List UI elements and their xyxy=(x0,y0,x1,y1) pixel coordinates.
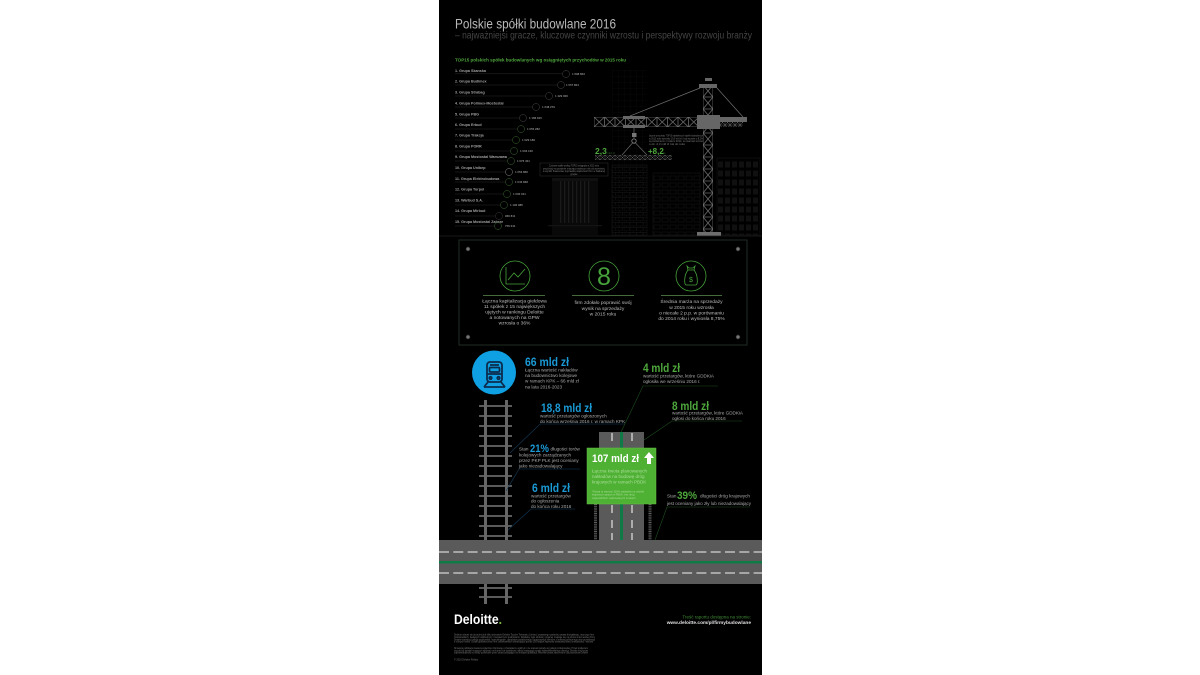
row 9 xyxy=(455,155,530,164)
sign description: nakładów na budowę dróg xyxy=(592,474,645,479)
row 14: 14. Grupa Mirbud xyxy=(455,209,486,213)
row 7: 7. Grupa Trakcja xyxy=(455,134,485,138)
crane description text xyxy=(649,134,704,146)
fact: market capitalisation: 11 spółek z 15 największych xyxy=(484,304,545,310)
rails xyxy=(486,400,506,604)
callout: 39%: długości dróg krajowych xyxy=(700,494,750,498)
crane description text: w porównaniu z rokiem 2014, co stanowi wzrost xyxy=(649,139,703,143)
callout: 6 mld zł: do ogłoszenia xyxy=(531,499,560,504)
fact: market capitalisation: a notowanych na GPW xyxy=(489,315,540,321)
callout: 18,8 mld zł xyxy=(510,403,626,453)
row 5: 5. Grupa PBG xyxy=(455,113,479,117)
panel screws xyxy=(466,247,740,339)
row 14: 966 811 xyxy=(505,214,516,218)
callout: 21%: 21% xyxy=(530,443,549,455)
row 1: 1. Grupa Skanska xyxy=(455,69,487,73)
callout: 66 mld zł: na budownictwo kolejowe xyxy=(525,373,578,378)
row 6 xyxy=(455,123,540,132)
stat 2,3 on beam xyxy=(595,146,615,156)
fact: market capitalisation: wzrosła o 36% xyxy=(499,320,531,326)
row 9: 9. Grupa Mostostal Warszawa xyxy=(455,155,508,159)
note box: a wyniki finansowe poprawiła większość firm w badanej xyxy=(543,170,605,173)
callout: 66 mld zł: 66 mld zł xyxy=(525,357,570,369)
rail track xyxy=(479,400,512,604)
row 10: 10. Grupa Unibep xyxy=(455,166,486,170)
row 3: 1 429 006 xyxy=(555,94,568,98)
row 7: 1 029 188 xyxy=(522,138,535,142)
legal text: Deloitte odnosi się do jednej lub kilku jednostek Deloitte Touche Tohmatsu Limited, prywatnego podmiotu prawa brytyjskiego, oraz jego firm xyxy=(454,632,594,636)
callout: 66 mld zł: na lata 2016-2023 xyxy=(525,384,562,389)
row 10 xyxy=(455,166,528,176)
icon: number eight xyxy=(589,261,619,291)
row 4: 4. Grupa Polimex-Mostostal xyxy=(455,101,504,105)
note box xyxy=(540,163,608,176)
callout: 66 mld zł xyxy=(525,357,579,389)
stat 2,3 on beam: 2,3 xyxy=(595,146,607,156)
sign description: krajowych w ramach PBDK xyxy=(592,480,646,484)
legal text: Deloitte świadczy usługi audytorskie, konsultingowe, doradztwa podatkowego i finansowego klientom z sektora publicznego oraz prywatnego xyxy=(454,637,596,641)
row 12: 12. Grupa Torpol xyxy=(455,188,484,192)
crane jib xyxy=(594,88,747,129)
horizontal road xyxy=(439,540,762,584)
fact: market capitalisation: ujętych w rankingu Deloitte xyxy=(485,310,544,316)
fact: eight companies: firm zdołało poprawić swój xyxy=(574,300,632,306)
callout: 4 mld zł: 4 mld zł xyxy=(643,363,681,375)
callout: 6 mld zł xyxy=(508,483,575,530)
fact: sales margin: o niecałe 2 p.p. w porównaniu xyxy=(659,310,724,316)
callout: 39%: Stan xyxy=(667,494,677,498)
callout: 21%: kolejowych zarządzanych xyxy=(519,452,572,457)
brick building xyxy=(612,165,647,235)
ground line xyxy=(439,235,762,237)
fact: sales margin: Średnia marża na sprzedaży xyxy=(660,297,723,305)
sign footnote: krajowych ujętych w PBDK, bez dróg xyxy=(592,493,635,497)
icon: money bag: $ xyxy=(689,277,693,284)
fact: sales margin: w 2015 roku wzrosła xyxy=(669,305,714,311)
panel: key facts plate xyxy=(459,240,747,345)
callout: 21%: długości torów xyxy=(550,446,581,452)
row 11 xyxy=(455,177,528,186)
page background panel xyxy=(439,0,762,675)
callout: 21% xyxy=(506,443,581,491)
road sign: 107 mld zł xyxy=(587,448,656,504)
sign headline: 107 mld zł xyxy=(592,453,639,465)
fact: eight companies: wynik na sprzedaży xyxy=(582,306,625,312)
callout: 39%: 39% xyxy=(677,490,697,502)
report link: www.deloitte.com/pl/firmybudowlane xyxy=(666,620,751,626)
legal text: członkowskich, będących oddzielnymi i niezależnymi podmiotami. Dokładny opis struktury prawnej znajduje się na stronie internetowej firmy xyxy=(454,635,596,639)
Deloitte logo: Deloitte. xyxy=(454,611,502,627)
row 15 xyxy=(455,220,516,230)
fact: sales margin xyxy=(658,296,725,322)
row 4 xyxy=(455,101,555,110)
callout: 21%: przez PKP PLK jest oceniany xyxy=(519,458,579,463)
middle office building xyxy=(653,173,700,235)
callout: 6 mld zł: 6 mld zł xyxy=(532,483,571,495)
legal text: z różnych branż. Dzięki globalnej sieci firm członkowskich obejmującej ponad 150 krajów zapewnia światowej klasy umiejętności i wiedzę xyxy=(454,640,594,644)
row 8: 8. Grupa PORR xyxy=(455,144,482,148)
callout: 66 mld zł: Łączna wartość nakładów xyxy=(525,368,578,372)
row 13: 1 190 985 xyxy=(510,203,523,207)
callout: 4 mld zł: wartość przetargów, które GDDKiA xyxy=(643,374,715,378)
title block xyxy=(455,16,752,42)
callout: 4 mld zł: ogłosiła we wrześniu 2016 r. xyxy=(643,379,700,384)
row 13 xyxy=(455,198,523,208)
callout: 8 mld zł xyxy=(644,401,744,440)
crane description text: Łączne przychody TOP15 największych spółek budowlanych xyxy=(649,134,703,138)
row 3 xyxy=(455,90,568,100)
row 11: 1 043 838 xyxy=(515,180,528,184)
row 5 xyxy=(455,113,542,122)
fact: sales margin: do 2014 roku i wyniosła 8,75% xyxy=(658,316,725,322)
legal text: © 2016 Deloitte Polska xyxy=(454,657,479,661)
stat +8,2 on beam: % xyxy=(663,151,666,155)
crane tower xyxy=(697,78,721,236)
row 1 xyxy=(455,69,585,78)
road lane dashes xyxy=(439,552,762,573)
note box: grupie xyxy=(571,173,578,176)
row 2 xyxy=(455,80,579,88)
callout: 18,8 mld zł: do końca września 2016 r. w ramach KPK xyxy=(540,419,626,424)
row 15: 15. Grupa Mostostal Zabrze xyxy=(455,220,503,224)
row 10: 1 053 866 xyxy=(515,170,528,174)
callout: 8 mld zł: 8 mld zł xyxy=(672,401,710,413)
icon: rising chart xyxy=(500,261,530,291)
subtitle: – najważniejsi gracze, kluczowe czynniki wzrostu i perspektywy rozwoju branży xyxy=(455,30,752,42)
ranking: top 15 construction companies xyxy=(455,58,626,230)
callout: 21%: Stan xyxy=(519,446,529,452)
stat +8,2 on beam: +8,2 xyxy=(648,147,664,156)
row 12 xyxy=(455,188,526,198)
legal text xyxy=(454,632,596,661)
legal text: Niniejsza publikacja zawiera wyłącznie informacje o charakterze ogólnym i nie stanowi porady ani usługi profesjonalnej. Przed podjęciem xyxy=(454,646,588,650)
row 3: 3. Grupa Strabag xyxy=(455,90,485,94)
callout: 21%: jako niezadowalający xyxy=(518,464,563,468)
fact: eight companies xyxy=(572,296,634,318)
rail sleepers xyxy=(479,406,512,597)
callout: 6 mld zł: do końca roku 2016 xyxy=(531,504,572,509)
legal text: odpowiedzialności za straty poniesione przez osoby polegające na niniejszej publikacji. Wszelkie prawa zastrzeżone dla podmiotów Deloitte xyxy=(454,651,588,655)
row 9: 1 076 401 xyxy=(517,159,530,163)
row 2: 1 557 804 xyxy=(566,83,579,87)
left columned building xyxy=(548,178,602,235)
callout: 4 mld zł xyxy=(621,363,718,432)
callout: 39%: jest oceniany jako zły lub niezadowalający xyxy=(666,501,752,506)
legal text: decyzji lub działań mogących wpłynąć na finanse lub działalność należy zasięgnąć porady wykwalifikowanego doradcy. Deloitte nie ponosi xyxy=(454,648,588,652)
row 15: 756 041 xyxy=(505,224,516,228)
row 5: 1 186 815 xyxy=(529,116,542,120)
row 8 xyxy=(455,144,533,154)
icon: number eight: 8 xyxy=(597,263,611,291)
sign footnote: *Kwota ta stanowi 100% nakładów na odcinki xyxy=(592,490,644,494)
row 14 xyxy=(455,209,516,220)
fact: eight companies: w 2015 roku xyxy=(590,312,617,318)
row 11: 11. Grupa Elektrobudowa xyxy=(455,177,500,181)
side barriers xyxy=(596,504,650,540)
illustration: construction site with crane xyxy=(439,70,762,236)
main title: Polskie spółki budowlane 2016 xyxy=(455,16,616,32)
row 12: 1 030 041 xyxy=(513,192,526,196)
row 8: 1 003 130 xyxy=(520,149,533,153)
background tall building xyxy=(612,70,647,235)
report link: Treść raportu dostępna na stronie: xyxy=(682,614,751,620)
sign description xyxy=(592,468,648,484)
row 6: 6. Grupa Erbud xyxy=(455,123,482,127)
right office building xyxy=(717,158,760,235)
vertical road with side barriers xyxy=(596,432,650,540)
sign footnote xyxy=(592,490,644,500)
callout: 66 mld zł: w ramach KPK – 66 mld zł xyxy=(525,378,579,384)
icon: money bag xyxy=(676,261,706,291)
callout: 39% xyxy=(655,490,752,540)
sign description: Łączna kwota planowanych xyxy=(592,468,648,474)
note box: przychody na poziomie znacząco wyższym niż rok wcześniej, xyxy=(543,167,605,170)
crane hook and load beam xyxy=(595,128,672,160)
row 13: 13. Warbud S.A. xyxy=(455,198,483,202)
stat 2,3 on beam: mld zł xyxy=(607,151,615,155)
callout: 18,8 mld zł: 18,8 mld zł xyxy=(541,403,593,415)
callout: 8 mld zł: wartość przetargów, które GDDKiA xyxy=(672,410,744,416)
callout: 8 mld zł: ogłosi do końca roku 2016 xyxy=(672,416,726,421)
report link xyxy=(666,614,751,626)
row 6: 1 055 282 xyxy=(527,127,540,131)
row 2: 2. Grupa Budimex xyxy=(455,80,488,84)
row 7 xyxy=(455,134,535,144)
icon: up arrow xyxy=(644,452,654,464)
crane description text: w 2015 roku wyniosły 19,9 mld zł i były wyższe o 8,2% xyxy=(649,136,704,140)
icon: train in blue circle xyxy=(472,350,516,394)
crane description text: o ok. 2,3 mld zł rok do roku xyxy=(649,142,686,146)
sign footnote: wojewódzkich realizowanych w latach xyxy=(592,496,636,500)
callout: 18,8 mld zł: wartość przetargów ogłoszonych xyxy=(540,414,607,418)
ranking heading: TOP15 polskich spółek budowlanych wg osiągniętych przychodów w 2015 roku xyxy=(455,58,626,62)
callout: 6 mld zł: wartość przetargów xyxy=(531,493,572,498)
row 1: 1 698 803 xyxy=(572,72,585,76)
fact: market capitalisation xyxy=(482,296,547,326)
note box: Czołowe spółki według TOP15 osiągnęły w 2015 roku xyxy=(549,164,600,168)
row 4: 1 248 279 xyxy=(542,105,555,109)
fact: market capitalisation: Łączna kapitalizacja giełdowa xyxy=(482,298,547,304)
lane dashes xyxy=(612,433,632,540)
